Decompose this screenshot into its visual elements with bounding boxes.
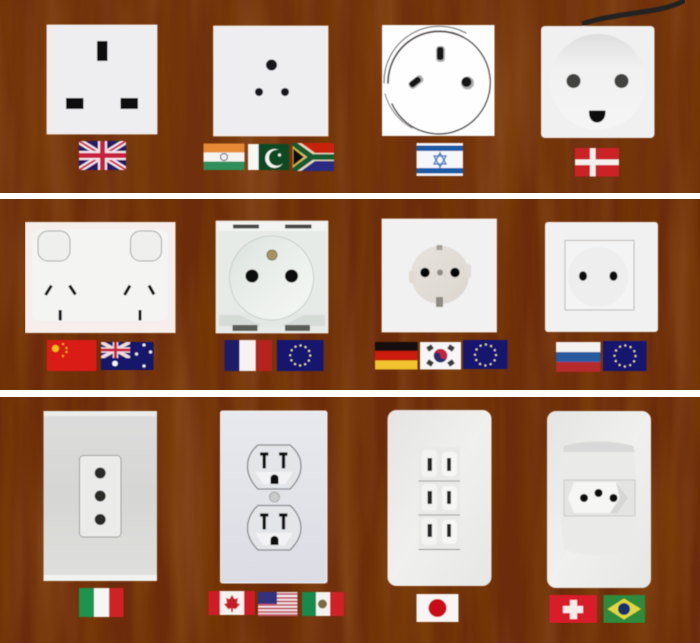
flag: India — [204, 144, 244, 170]
socket: Australia / China type I double — [25, 222, 176, 333]
outlet 3 — [422, 518, 457, 545]
white row dividers — [0, 193, 700, 397]
clips top — [233, 224, 312, 228]
socket: Denmark type K — [541, 26, 654, 138]
power cable — [582, 0, 685, 24]
flag: France — [224, 340, 272, 371]
outlet 1 — [422, 450, 457, 477]
pins left — [46, 286, 76, 320]
socket: Russia type C — [545, 222, 658, 332]
socket: North America type B — [220, 411, 327, 583]
flag: Italy — [79, 588, 124, 617]
flag: Denmark — [575, 148, 619, 176]
flag: China — [47, 340, 96, 371]
screw — [270, 492, 280, 502]
flag: Pakistan — [248, 144, 289, 170]
clips bottom — [232, 325, 310, 331]
flag: Australia — [101, 342, 154, 370]
socket: Germany type F — [382, 219, 496, 332]
switch right — [130, 231, 162, 261]
socket: UK type G — [47, 25, 157, 134]
socket: Switzerland / Brazil type N — [547, 411, 651, 588]
lower receptacle — [248, 506, 301, 550]
socket: France type E — [216, 221, 328, 333]
socket: India type D — [214, 26, 328, 136]
flag: Israel — [416, 143, 463, 176]
flag: Japan — [416, 594, 458, 622]
pins right — [124, 286, 154, 320]
socket: Japan type A triple — [388, 410, 492, 586]
flag: South Korea — [420, 342, 461, 370]
flag: Switzerland — [550, 595, 597, 623]
outlet 2 — [422, 484, 457, 511]
flag: Brazil — [604, 595, 645, 623]
flag: Germany — [375, 342, 418, 370]
flag: United States — [258, 592, 298, 616]
flag: Russia — [556, 342, 600, 372]
flag: Canada — [208, 591, 255, 615]
upper receptacle — [248, 445, 301, 489]
flag: EU (France group) — [277, 340, 324, 371]
flag: United Kingdom — [79, 141, 126, 170]
flag: Mexico — [302, 592, 344, 616]
socket: Italy type L — [44, 411, 157, 581]
flag: EU (Germany group) — [463, 340, 508, 369]
flag: South Africa — [292, 143, 334, 171]
socket: Israel type H — [382, 25, 494, 136]
ring arcs — [384, 26, 490, 134]
switch left — [38, 231, 70, 261]
flag: EU (Russia group) — [603, 341, 646, 371]
